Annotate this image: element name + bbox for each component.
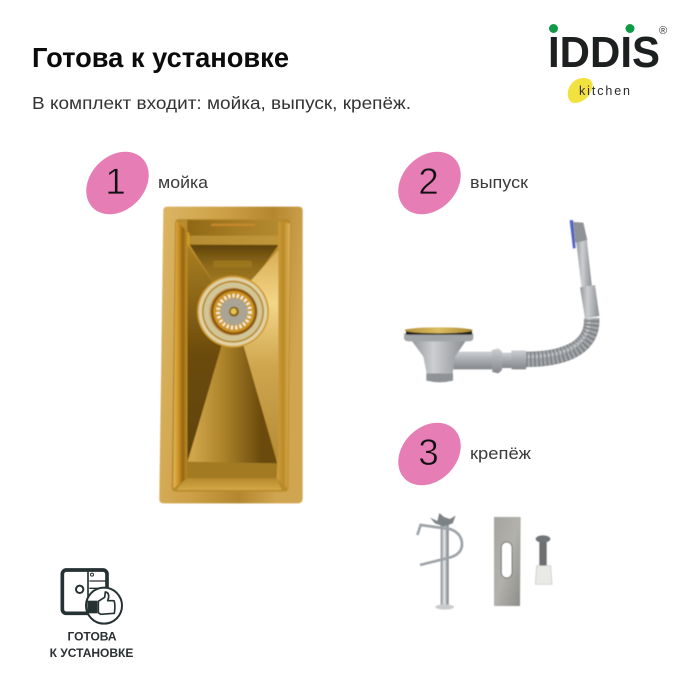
overflow pipe	[576, 238, 592, 288]
subtitle: В комплект входит: мойка, выпуск, крепёж.	[32, 93, 411, 113]
logo: IDDIS kitchen: ®	[659, 25, 667, 37]
number badge 2	[386, 139, 473, 227]
number badge 1	[74, 139, 161, 227]
pipe coupling	[580, 285, 599, 319]
gold strainer flange	[404, 327, 473, 341]
overflow hose	[512, 318, 592, 359]
number badge 3	[386, 410, 473, 498]
logo: IDDIS kitchen: kitchen	[579, 84, 630, 98]
icon: thumbs up badge	[86, 588, 122, 624]
mounting bolt with clip	[417, 513, 462, 610]
slotted metal plate	[494, 517, 521, 606]
number badge 3: 3	[418, 432, 439, 473]
icon caption	[50, 630, 133, 660]
logo: IDDIS kitchen	[548, 24, 667, 103]
sink rim	[159, 207, 303, 503]
icon: sink cabinet outline	[62, 570, 107, 613]
product: mounting hardware	[417, 513, 552, 610]
number badge 2: 2	[418, 161, 439, 202]
icon caption: К УСТАНОВКЕ	[50, 646, 133, 660]
title: Готова к установке	[32, 42, 289, 73]
label: мойка: мойка	[158, 174, 209, 192]
sink basin	[172, 219, 291, 492]
number badge 1: 1	[105, 161, 126, 202]
icon: ready to install	[62, 570, 122, 624]
screw with plastic anchor	[535, 535, 552, 584]
icon caption: ГОТОВА	[67, 630, 117, 644]
overflow head	[570, 220, 587, 249]
sink drain	[197, 276, 269, 348]
logo: IDDIS kitchen: IDDIS	[548, 28, 660, 77]
label: выпуск: выпуск	[470, 174, 529, 192]
product: drain outlet with hose	[404, 220, 599, 382]
label: крепёж: крепёж	[470, 445, 531, 463]
outlet body	[412, 341, 526, 382]
product: gold sink	[159, 207, 303, 503]
